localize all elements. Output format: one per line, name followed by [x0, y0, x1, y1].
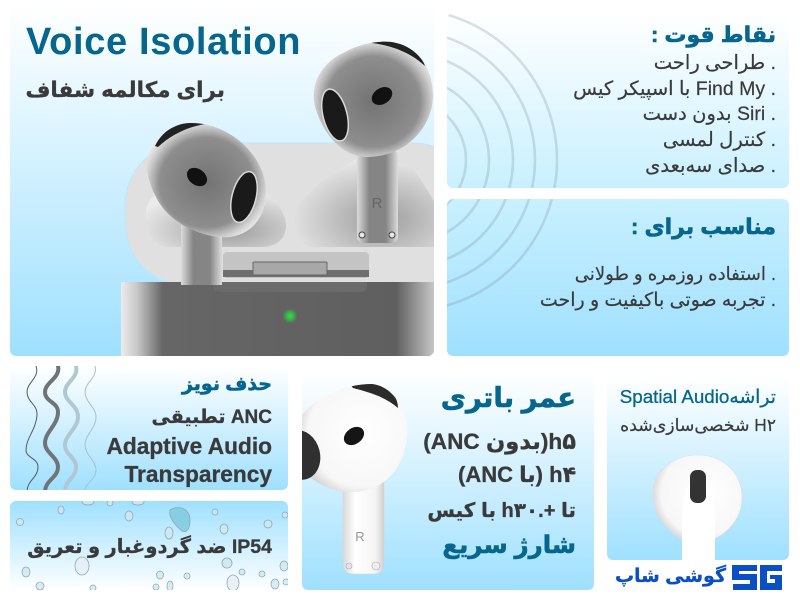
- right earbud: R: [372, 195, 383, 212]
- panel: strengths: [447, 13, 789, 188]
- logo mark: [732, 565, 782, 590]
- panel: battery life: [302, 372, 594, 590]
- sound rings: [447, 199, 554, 307]
- earbud: back view: [652, 454, 742, 560]
- features: Transparency: [124, 461, 272, 487]
- logo: Gooshi Shop: [615, 564, 782, 590]
- features: [106, 407, 272, 488]
- strengths list: . Siri بدون دست: [643, 103, 776, 125]
- chip text: H۲ شخصی‌سازی‌شده: [620, 415, 776, 435]
- fast charge: شارژ سریع: [442, 532, 576, 559]
- strengths list: . صدای سه‌بعدی: [645, 155, 776, 177]
- battery specs: h۵(بدون ANC): [423, 429, 576, 454]
- strengths list: [573, 52, 776, 177]
- panel: IP54: [10, 501, 288, 590]
- logo text: گوشی شاپ: [615, 566, 726, 587]
- water drops: [16, 501, 288, 590]
- right earbud: [314, 38, 433, 243]
- panel: noise cancellation: [10, 366, 288, 490]
- chip heading: تراشهSpatial Audio: [620, 386, 776, 407]
- case base with LED: [121, 282, 441, 362]
- panel: voice isolation hero: [10, 5, 434, 356]
- suitable list: . استفاده روزمره و طولانی: [575, 264, 776, 284]
- panel: H2 chip: [607, 376, 789, 560]
- strengths list: . Find My با اسپیکر کیس: [573, 78, 776, 100]
- suitable list: [540, 264, 776, 311]
- earbud: white side view: [302, 384, 407, 574]
- features: ANC تطبیقی: [151, 407, 272, 428]
- panel: suitable for: [447, 199, 789, 356]
- strengths list: . طراحی راحت: [654, 52, 776, 74]
- case lid: [125, 143, 475, 285]
- heading: حذف نویز: [182, 374, 272, 395]
- battery specs: تا h۳۰.+ با کیس: [427, 500, 576, 522]
- suitable list: . تجربه صوتی باکیفیت و راحت: [540, 290, 776, 311]
- features: Adaptive Audio: [106, 433, 272, 459]
- strengths list: . کنترل لمسی: [663, 129, 776, 151]
- heading: نقاط قوت :: [651, 22, 776, 47]
- heading: عمر باتری: [441, 382, 576, 413]
- illustration: airpods and open charging case: [121, 42, 434, 356]
- IP54 text: IP54 ضد گردوغبار و تعریق: [27, 536, 272, 558]
- sound waves: [26, 366, 96, 490]
- title: Voice Isolation: [26, 21, 301, 63]
- sound rings: [447, 14, 558, 188]
- left earbud: [147, 122, 266, 285]
- earbud: white side view: R: [355, 529, 365, 544]
- battery specs: [423, 429, 576, 522]
- subtitle: برای مکالمه شفاف: [25, 78, 225, 102]
- heading: مناسب برای :: [631, 214, 776, 239]
- battery specs: h۴ (با ANC): [458, 462, 576, 487]
